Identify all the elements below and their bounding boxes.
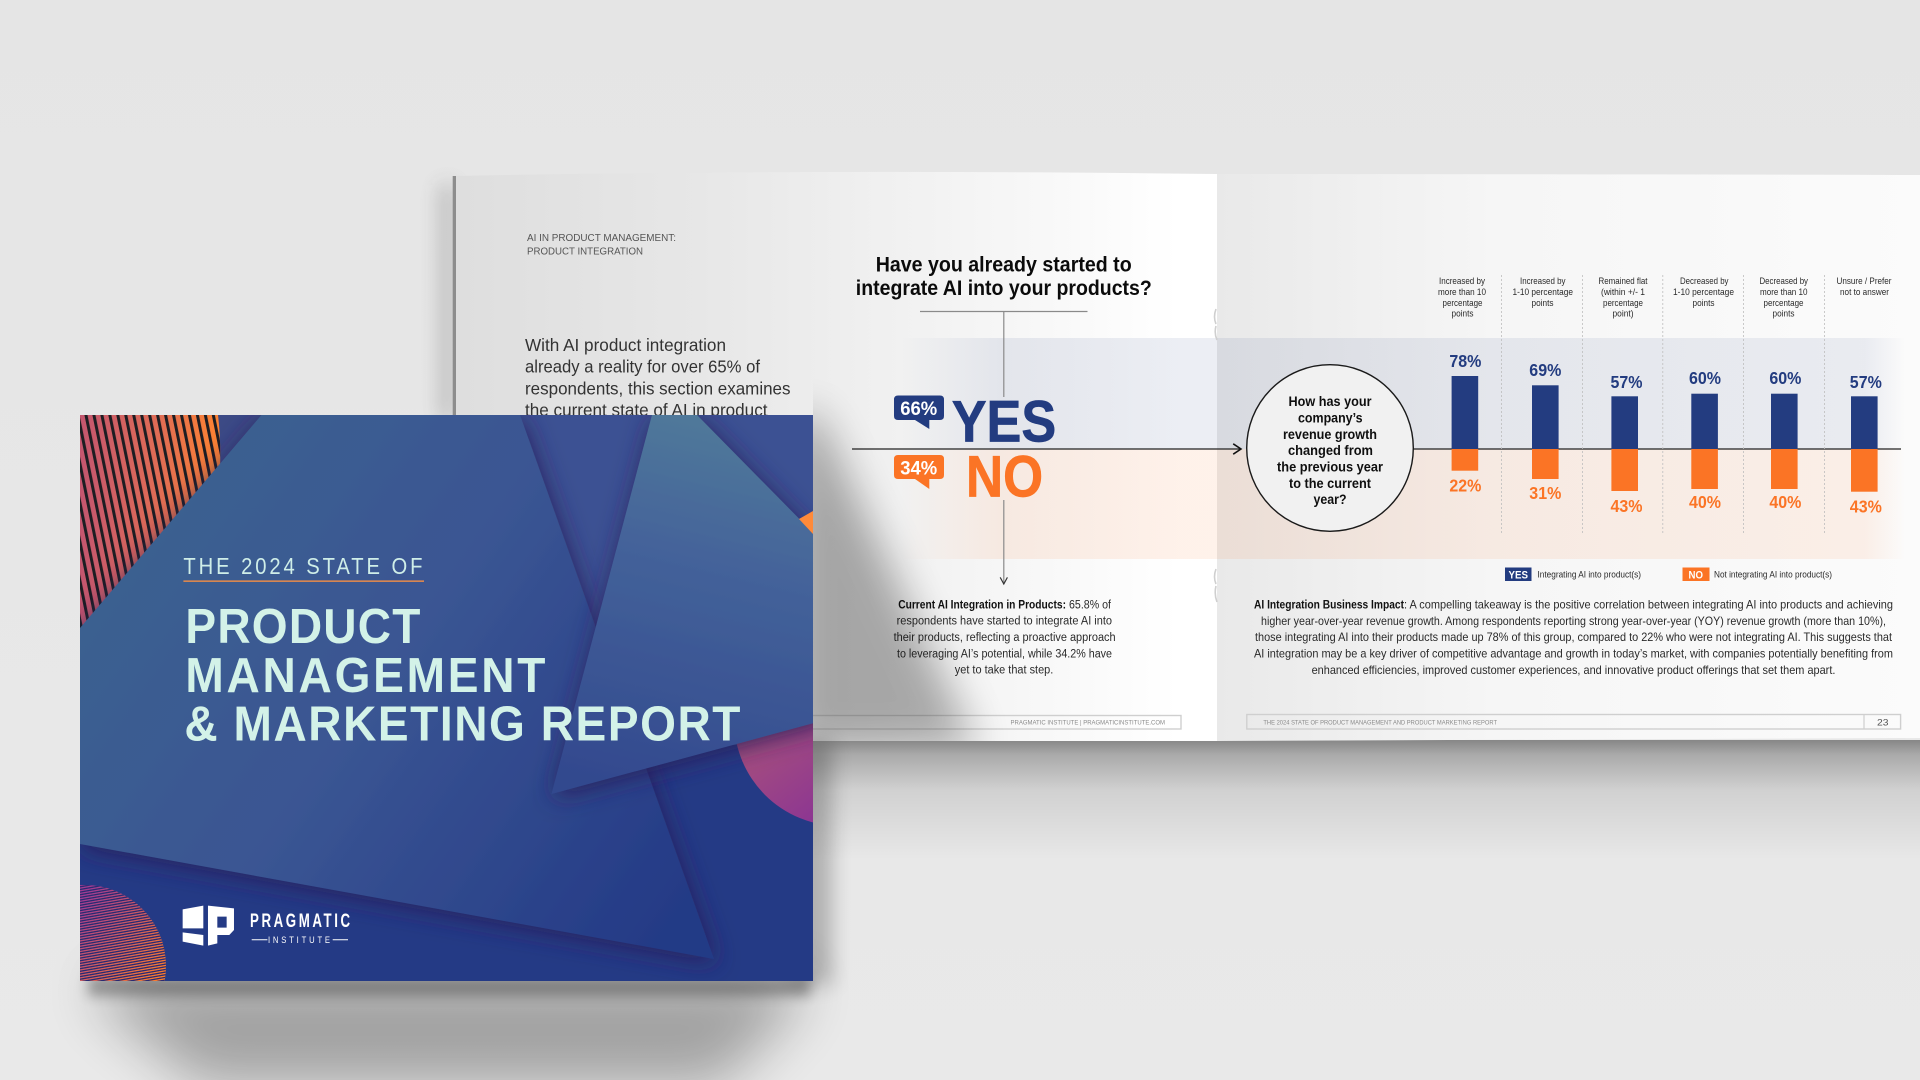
values: no: 43% — [1610, 496, 1643, 516]
column headers — [1438, 276, 1892, 320]
panel: right page — [1217, 174, 1920, 741]
intro paragraph — [525, 335, 791, 420]
logo: Pragmatic Institute — [183, 906, 350, 946]
footer: right page: 23 — [1877, 718, 1888, 728]
decorative: hatched circle — [80, 885, 166, 981]
question heading: Have you already started to — [876, 254, 1132, 276]
column dividers — [1502, 275, 1824, 533]
callout: 34% no: 34% — [900, 458, 937, 479]
triangle: front — [552, 415, 825, 794]
question circle: year? — [1314, 491, 1346, 507]
cover shadow — [88, 415, 978, 1080]
text block: business impact: enhanced efficiencies, improved customer experiences, and innovative product offerings that set them apart. — [1312, 664, 1835, 677]
callout: 66% yes — [894, 396, 944, 429]
callout: 34% no — [894, 455, 944, 489]
column headers: Increased by — [1439, 276, 1485, 287]
logo: Pragmatic Institute: PRAGMATIC — [250, 911, 350, 932]
spine staples — [1214, 309, 1217, 602]
values: no: 43% — [1850, 496, 1882, 516]
decorative: purple circle — [736, 723, 813, 822]
connector lines — [920, 312, 1088, 584]
column headers: Decreased by — [1760, 276, 1808, 287]
text block: business impact — [1254, 598, 1893, 677]
question circle: revenue growth — [1283, 426, 1377, 442]
question circle: How has your — [1288, 393, 1372, 409]
values: yes: 60% — [1689, 368, 1721, 388]
values: yes — [1449, 351, 1882, 392]
values: yes: 60% — [1769, 368, 1802, 388]
column headers: points — [1452, 309, 1474, 320]
question circle: the previous year — [1277, 458, 1384, 474]
magazine shadow — [441, 185, 1920, 860]
column headers: Remained flat — [1598, 276, 1648, 287]
footer: right page — [1247, 714, 1901, 729]
text block: business impact: AI integration may be a key driver of competitive advantage and growth in today’s market, with companies potentially benefiting from — [1254, 648, 1893, 660]
bars: yes — [1452, 376, 1878, 449]
footer: left page: PRAGMATIC INSTITUTE | PRAGMATICINSTITUTE.COM — [1010, 719, 1165, 726]
legend: Not integrating AI into product(s) — [1714, 569, 1832, 579]
values: no: 40% — [1689, 492, 1721, 512]
column headers: more than 10 — [1438, 287, 1486, 298]
column headers: Decreased by — [1680, 276, 1729, 287]
legend: Integrating AI into product(s) — [1538, 569, 1641, 579]
column headers: (within +/- 1 — [1601, 287, 1645, 298]
text block: business impact: higher year-over-year revenue growth. Among respondents reporting strong year-over-year (YOY) revenue growth (more than 10%), — [1261, 615, 1886, 628]
text block: business impact: : A compelling takeaway is the positive correlation between integrating AI into products and achieving — [1404, 598, 1893, 612]
question circle: changed from — [1288, 442, 1373, 458]
chart axis — [1413, 448, 1901, 450]
text block: current AI integration: respondents have started to integrate AI into — [897, 616, 1112, 628]
footer: left page — [700, 716, 1181, 729]
text block: business impact: AI Integration Business Impact — [1254, 598, 1404, 612]
intro paragraph: already a reality for over 65% of — [525, 356, 760, 376]
values: yes: 69% — [1529, 360, 1562, 380]
cover title — [184, 600, 740, 752]
intro paragraph: With AI product integration — [525, 335, 726, 355]
axis arrow into circle — [852, 448, 1241, 450]
cover title: PRODUCT — [185, 600, 420, 654]
decorative: orange corner — [799, 511, 813, 534]
values: no: 22% — [1449, 476, 1482, 496]
column headers: point) — [1612, 309, 1634, 320]
column headers: Increased by — [1520, 276, 1566, 287]
legend: YES — [1508, 570, 1528, 582]
values: yes: 57% — [1850, 372, 1882, 392]
pattern: stripes — [80, 415, 220, 632]
text block: current AI integration: to leveraging AI’s potential, while 34.2% have — [897, 648, 1112, 660]
column headers: 1-10 percentage — [1673, 287, 1734, 298]
question heading — [856, 254, 1152, 300]
values: no: 40% — [1769, 492, 1802, 512]
legend: NO — [1688, 570, 1703, 582]
values: no: 31% — [1529, 483, 1562, 503]
heading: NO: NO — [966, 444, 1043, 509]
section label — [527, 233, 676, 258]
column headers: percentage — [1442, 298, 1482, 309]
values: yes: 57% — [1610, 372, 1643, 392]
heading: YES: YES — [952, 390, 1056, 454]
text block: current AI integration: Current AI Integration in Products: — [898, 600, 1066, 612]
question heading: integrate AI into your products? — [856, 277, 1152, 300]
column headers: percentage — [1764, 298, 1804, 309]
icon: logo mark — [183, 906, 234, 946]
column headers: points — [1532, 298, 1554, 309]
open magazine spread — [453, 172, 1920, 741]
bar chart — [1449, 351, 1882, 516]
column headers: points — [1772, 309, 1795, 320]
cover subtitle: THE 2024 STATE OF — [183, 553, 422, 579]
text block: current AI integration: yet to take that step. — [955, 665, 1053, 677]
footer: right page: THE 2024 STATE OF PRODUCT MANAGEMENT AND PRODUCT MARKETING REPORT — [1263, 719, 1497, 726]
callout: 66% yes: 66% — [900, 399, 937, 420]
column headers: 1-10 percentage — [1512, 287, 1573, 298]
text block: current AI integration: their products, reflecting a proactive approach — [894, 632, 1116, 644]
section label: AI IN PRODUCT MANAGEMENT: — [527, 233, 676, 244]
section label: PRODUCT INTEGRATION — [527, 246, 643, 258]
intro paragraph: respondents, this section examines — [525, 378, 791, 398]
question circle: to the current — [1289, 475, 1371, 491]
column headers: percentage — [1603, 298, 1643, 309]
cover title: MANAGEMENT — [185, 649, 545, 703]
question circle: company’s — [1298, 410, 1363, 426]
colour bands — [900, 338, 1905, 559]
legend — [1505, 568, 1832, 582]
triangle: main — [80, 415, 714, 959]
logo: Pragmatic Institute: INSTITUTE — [268, 934, 330, 945]
values: no — [1449, 476, 1882, 516]
panel: report cover — [80, 415, 813, 981]
text block: business impact: those integrating AI into their products made up 78% of this group, compared to 22% who were not integrating AI. This suggests that — [1255, 631, 1893, 644]
column headers: Unsure / Prefer — [1836, 276, 1892, 287]
cover artwork — [80, 415, 813, 981]
text block: current AI integration: 65.8% of — [1069, 600, 1112, 612]
bars: no — [1452, 449, 1878, 492]
values: yes: 78% — [1449, 351, 1482, 371]
cover title: & MARKETING REPORT — [184, 697, 740, 752]
column headers: not to answer — [1840, 287, 1889, 298]
panel: left page — [453, 172, 1217, 741]
question circle — [1247, 365, 1413, 531]
column headers: points — [1692, 298, 1715, 309]
column headers: more than 10 — [1760, 287, 1808, 298]
text block: current AI integration — [894, 600, 1116, 677]
intro paragraph: the current state of AI in product — [525, 400, 768, 420]
